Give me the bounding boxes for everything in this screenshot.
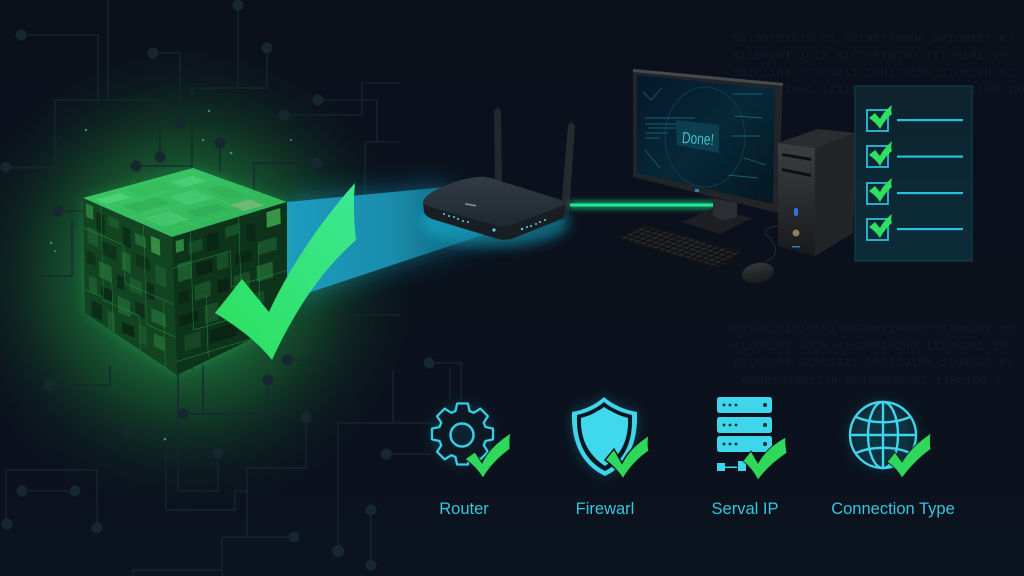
monitor [633,69,783,234]
green glow behind cube [0,40,420,510]
checklist panel [855,86,972,261]
green check [605,435,649,479]
checklist row 1 [867,105,963,131]
binary digits top right [732,32,1024,97]
cube left face [83,198,177,375]
green check [743,437,787,480]
cube right face [170,200,291,378]
binary digits top right: 10101100 01001011 100110100 1100100 01 [732,66,1014,80]
large check mark [215,183,356,360]
green connection line [570,201,715,209]
icon: server stack [717,397,787,480]
label: Connection Type: Connection Type [831,500,955,518]
green check [887,433,931,478]
binary digits top right: 00100101010 01 00100110000 00100101 01 [732,32,1014,46]
label: Firewarl: Firewarl [576,500,634,518]
label: Serval IP: Serval IP [712,500,778,518]
keyboard [615,224,745,270]
tower buttons [792,208,800,248]
router antennas [494,107,575,213]
checklist row 3 [867,178,963,204]
binary digits top right: 01100101 1010 01010010100 11100101 10 [732,49,1007,63]
binary digits bottom right: 0000101001110 00100000101 1100100 1 [742,374,1002,388]
computer tower [778,129,857,256]
binary digits bottom right: 01100101 1010 01010010100 11100101 10 [732,339,1007,353]
beam from cube to router [287,187,483,300]
icon: globe [849,401,931,478]
monitor stand [682,198,752,234]
icon: router gear [432,403,511,478]
router body [423,177,565,240]
cube [80,165,291,380]
monitor screen [637,75,775,204]
cube top face [83,168,287,237]
done box: Done! [681,130,714,149]
router [421,107,575,247]
checklist row 2 [867,141,963,167]
binary digits bottom right [732,322,1014,388]
binary digits bottom right: 00100101010 01 00100110000 00100101 01 [732,322,1014,336]
checklist row 4 [867,214,963,240]
sparkle dots [50,110,292,440]
circuit traces background [0,0,461,576]
router glow [421,197,569,247]
icon: firewall shield [572,397,649,479]
router LEDs [443,213,546,232]
mouse [740,226,778,286]
monitor frame [633,69,783,213]
green check [465,433,511,478]
label: Router: Router [439,500,489,518]
binary digits bottom right: 10101100 01001011 100110100 1100100 01 [732,356,1014,370]
